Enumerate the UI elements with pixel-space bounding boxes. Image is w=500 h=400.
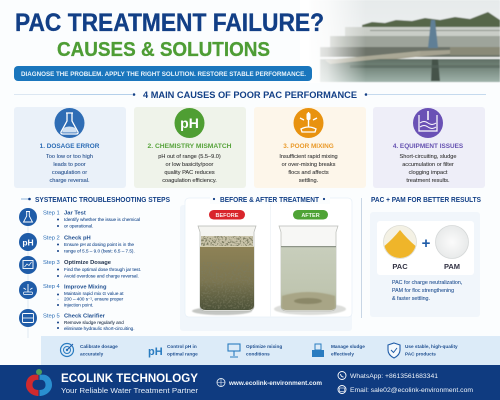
benefit: optimize mixing: [228, 344, 282, 357]
card text: Too low or too high: [46, 154, 93, 160]
card text: or low basicity/poor: [166, 162, 214, 168]
card text: pH out of range (5.5–9.0): [158, 154, 221, 160]
tagline banner: [14, 66, 312, 81]
step 3: Find the optimal dose through jar test.: [64, 267, 141, 272]
card heading: 3. POOR MIXING: [283, 143, 334, 150]
step 2: [19, 233, 135, 254]
card text: accumulation or filter: [402, 162, 454, 168]
panel: troubleshooting steps: [19, 197, 170, 338]
benefit: manage sludge: effectively: [331, 352, 354, 356]
website: [217, 378, 322, 387]
benefit: control pH: pH: [148, 346, 163, 358]
card text: leads to poor: [53, 162, 86, 168]
card text: coagulation efficiency.: [162, 178, 217, 184]
step 3: Avoid overdose and charge reversal.: [64, 274, 139, 278]
step 1: or operational.: [64, 224, 93, 228]
beaker: before: [192, 226, 256, 315]
badge: after: [293, 210, 328, 220]
benefit: optimize mixing: conditions: [246, 352, 270, 356]
beaker: after: [274, 226, 346, 315]
description: PAM for floc strengthening: [392, 288, 454, 294]
step 4: Step 4: [43, 284, 61, 290]
step 3: Step 3: [43, 260, 60, 266]
description: PAC for charge neutralization,: [392, 280, 462, 286]
icon: mixer: [294, 108, 324, 138]
logo: [26, 369, 52, 396]
step 4: 200 – 400 s⁻¹, ensure proper: [64, 296, 124, 302]
panel: dosage error: [14, 107, 126, 188]
step 2: pH: [22, 238, 34, 248]
benefit: manage sludge: [312, 344, 365, 357]
step 1: Step 1: [43, 210, 60, 216]
card text: coagulation or: [52, 170, 87, 176]
step 4: [19, 281, 124, 308]
step 5: [19, 309, 134, 331]
card text: flocs and affects: [288, 170, 329, 176]
benefit: quality: Use stable, high-quality: [405, 344, 458, 349]
section heading: 4 main causes: 4 MAIN CAUSES OF POOR PAC PERFORMANCE: [143, 90, 357, 100]
step 2: range of 5.5 – 9.0 (best: 6.5 – 7.5).: [64, 248, 135, 254]
card text: charge reversal.: [49, 178, 90, 184]
benefit: control pH: optimal range: [167, 352, 198, 356]
whatsapp: WhatsApp: +8613561683341: [350, 374, 439, 380]
step 1: Identify whether the issue is chemical: [64, 217, 140, 222]
step 5: Check Clarifier: [64, 314, 106, 320]
icon: PAM powder: [436, 226, 468, 258]
heading: PAC + PAM: PAC + PAM FOR BETTER RESULTS: [371, 197, 481, 204]
step 5: eliminate hydraulic short-circuiting.: [64, 326, 134, 331]
card heading: 2. CHEMISTRY MISMATCH: [148, 143, 232, 150]
panel: chemistry mismatch: [134, 107, 246, 188]
website: www.ecolink-environment.com: [228, 381, 322, 387]
card text: settling.: [299, 178, 319, 184]
products card: [377, 221, 474, 275]
benefit: control pH: [148, 344, 198, 358]
step 1: [19, 208, 140, 228]
heading: troubleshooting: SYSTEMATIC TROUBLESHOOTING STEPS: [35, 197, 170, 204]
step 4: Maintain rapid mix G value at: [64, 291, 124, 296]
photo: water treatment clarifier: [300, 0, 500, 83]
icon: pH: pH: [180, 115, 199, 131]
panel: before and after: [180, 196, 352, 331]
whatsapp: [338, 372, 439, 380]
step 5: Remove sludge regularly and: [64, 320, 124, 325]
step 3: [19, 256, 141, 278]
benefit: quality: [388, 343, 458, 358]
plus sign: +: [422, 235, 431, 252]
label: PAM: PAM: [444, 262, 460, 271]
heading: before and after: BEFORE & AFTER TREATMENT: [220, 197, 320, 204]
benefit: calibrate: Calibrate dosage: [80, 344, 118, 349]
step 4: injection point.: [64, 302, 93, 308]
benefit: quality: PAC products: [405, 352, 436, 356]
benefit: control pH: Control pH in: [167, 344, 197, 349]
card text: treatment results.: [406, 178, 450, 184]
badge: before: BEFORE: [216, 213, 239, 219]
icon: flask: [54, 108, 84, 138]
email: [338, 386, 473, 394]
step 1: Jar Test: [64, 210, 86, 216]
card text: quality PAC reduces: [164, 170, 215, 176]
subtitle: CAUSES & SOLUTIONS: [57, 39, 270, 61]
tagline banner: DIAGNOSE THE PROBLEM. APPLY THE RIGHT SOLUTION. RESTORE STABLE PERFORMANCE.: [21, 71, 306, 78]
icon: tank: [413, 108, 443, 138]
benefit: calibrate: [60, 344, 118, 356]
card text: Short-circuiting, sludge: [400, 154, 456, 160]
benefit: optimize mixing: Optimize mixing: [246, 344, 282, 349]
panel: equipment issues: [373, 107, 485, 188]
title: PAC TREATMENT FAILURE?: [15, 9, 324, 37]
step 4: Improve Mixing: [64, 284, 107, 290]
label: PAC: PAC: [392, 262, 408, 271]
company name: ECOLINK TECHNOLOGY: [61, 371, 198, 385]
step 3: Optimize Dosage: [64, 260, 112, 266]
benefit: calibrate: accurately: [80, 352, 104, 356]
panel: PAC + PAM: [361, 197, 481, 318]
step 2: Check pH: [64, 236, 91, 242]
company tagline: Your Reliable Water Treatment Partner: [61, 386, 199, 395]
email: Email: sale02@ecolink-environment.com: [350, 388, 473, 394]
benefits strip: [41, 336, 500, 365]
badge: before: [209, 210, 245, 220]
step 5: Step 5: [43, 314, 60, 320]
step 2: Step 2: [43, 236, 60, 242]
card heading: 4. EQUIPMENT ISSUES: [393, 143, 464, 150]
card text: Insufficient rapid mixing: [279, 154, 338, 160]
panel: poor mixing: [254, 107, 366, 188]
card text: clogging impact: [409, 170, 448, 176]
badge: after: AFTER: [301, 213, 320, 219]
card heading: 1. DOSAGE ERROR: [40, 143, 100, 150]
card text: or over-mixing breaks: [282, 162, 336, 168]
benefit: manage sludge: Manage sludge: [331, 344, 365, 349]
step 2: Ensure pH at dosing point is in the: [64, 242, 134, 247]
description: & faster settling.: [392, 296, 430, 302]
icon: PAC powder: [382, 226, 418, 260]
footer bar: [0, 365, 500, 400]
